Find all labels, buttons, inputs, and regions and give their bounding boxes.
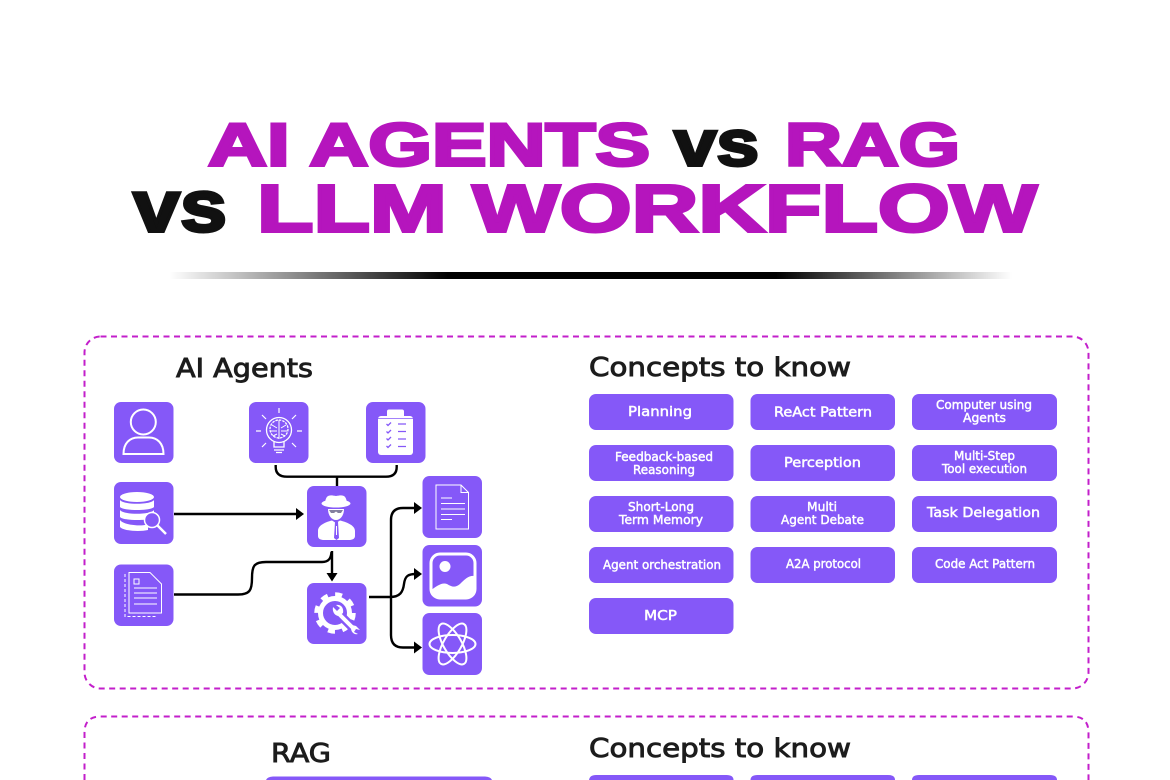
concept buttons: A2A protocol (786, 557, 861, 571)
title: vs (674, 106, 759, 180)
concept buttons: Perception (784, 455, 861, 471)
concept buttons: Task Delegation (926, 505, 1040, 521)
title underline rule (169, 272, 1012, 279)
RAG diagram bar (266, 776, 492, 780)
title: RAG (785, 112, 960, 178)
panel: RAG (84, 716, 1088, 780)
concept buttons: Code Act Pattern (935, 557, 1035, 571)
title: AI AGENTS (208, 112, 650, 178)
panel: AI Agents (84, 336, 1088, 688)
concept buttons: ReAct Pattern (774, 404, 872, 420)
concept buttons: Computer using (936, 398, 1032, 412)
title: vs (133, 166, 227, 248)
heading: Concepts to know: Concepts to know (589, 353, 851, 383)
icon: user (114, 402, 174, 463)
concept buttons: Agents (963, 411, 1006, 425)
title: LLM WORKFLOW (257, 172, 1038, 246)
heading: RAG: RAG (271, 739, 331, 769)
concept buttons: Term Memory (618, 513, 703, 527)
icon: checklist clipboard (366, 402, 426, 463)
concept buttons: Multi-Step (954, 449, 1015, 463)
concept buttons: MCP (644, 608, 677, 624)
concept buttons: Agent Debate (781, 513, 864, 527)
concept buttons: Reasoning (633, 463, 695, 477)
heading: Concepts to know (RAG): Concepts to know (589, 734, 851, 764)
concept buttons: Multi (807, 500, 837, 514)
concept buttons (589, 394, 1057, 634)
concept buttons: Feedback-based (615, 450, 713, 464)
icon: agent (307, 486, 366, 547)
icon: database search (114, 482, 174, 544)
RAG concept buttons (589, 775, 1057, 780)
icon: atom (422, 613, 482, 675)
heading: AI Agents: AI Agents (176, 354, 313, 384)
icon: documents (114, 564, 174, 626)
icon: lightbulb brain (249, 402, 308, 463)
concept buttons: Tool execution (941, 462, 1027, 476)
concept buttons: Agent orchestration (603, 558, 721, 572)
icon: image (422, 545, 482, 606)
title (133, 106, 1038, 248)
concept buttons: Planning (628, 404, 692, 420)
connector arrows (174, 465, 422, 654)
concept buttons: Short-Long (628, 500, 694, 514)
icon: document (422, 476, 482, 538)
icon: tools (307, 583, 366, 644)
